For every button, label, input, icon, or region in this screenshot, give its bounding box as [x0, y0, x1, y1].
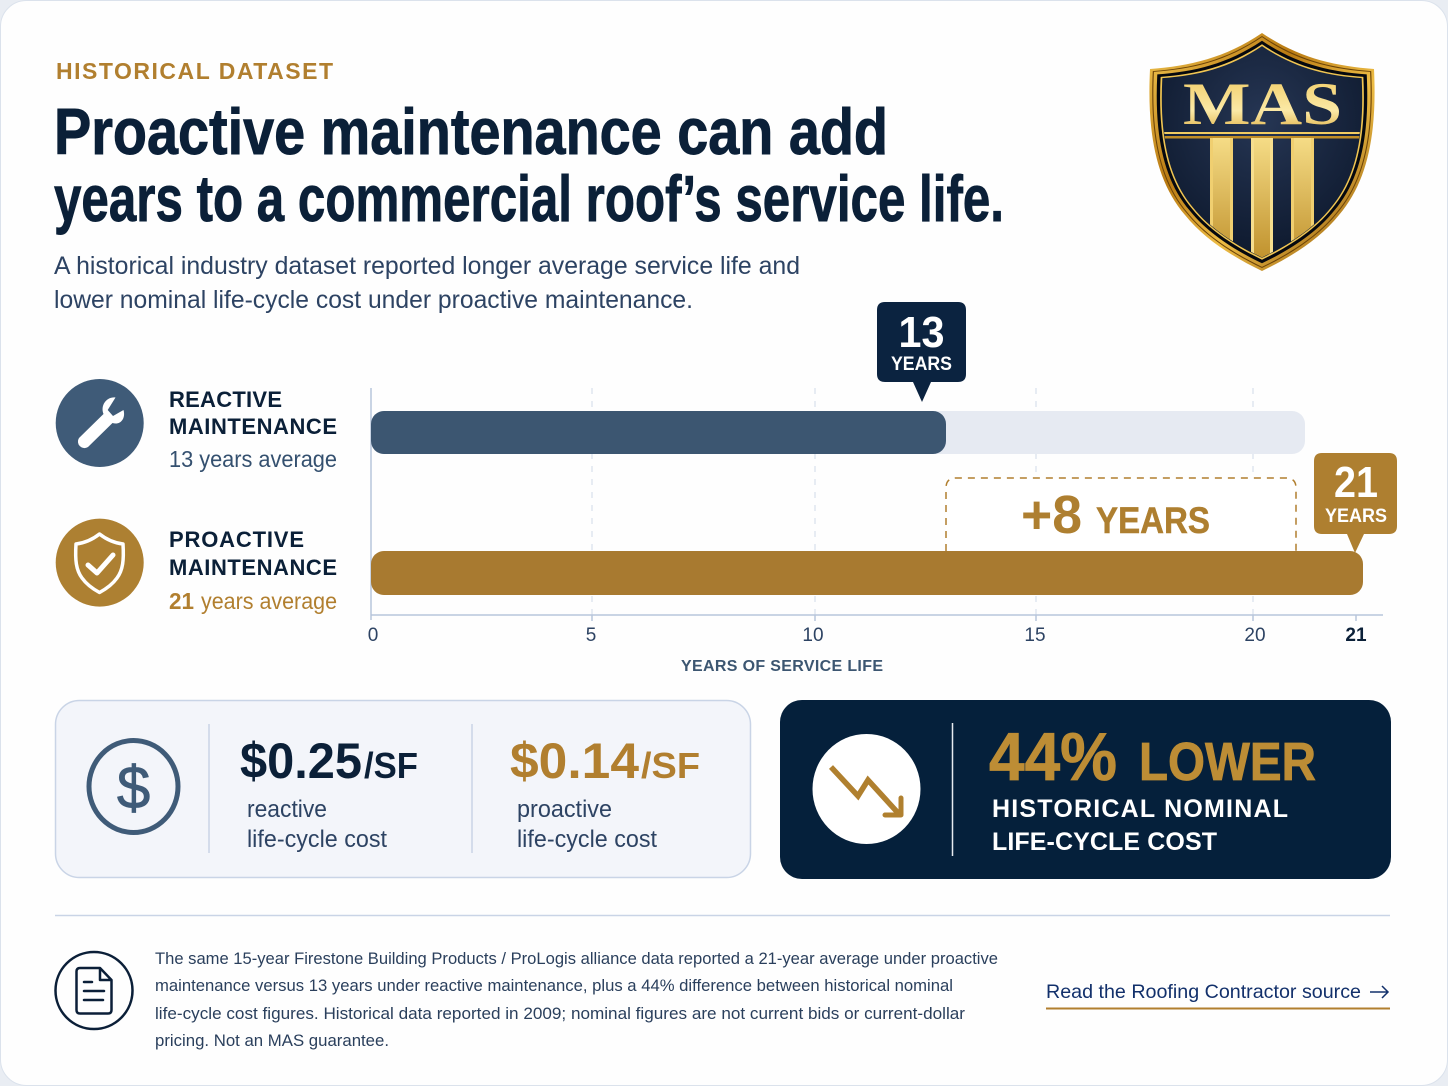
icon: dollar [89, 740, 178, 832]
footnote text [155, 950, 998, 1050]
subtitle: lower nominal life-cycle cost under proactive maintenance. [54, 286, 693, 314]
stat: proactive cost: life-cycle cost [517, 826, 657, 853]
stat headline: 44% [989, 719, 1117, 795]
subtitle [54, 252, 800, 314]
stat: reactive cost: /SF [364, 745, 418, 786]
footnote text: pricing. Not an MAS guarantee. [155, 1032, 389, 1050]
label: proactive maintenance: 21 [169, 588, 194, 614]
label: reactive maintenance: REACTIVE [169, 387, 282, 412]
title: Proactive maintenance can add [54, 95, 888, 168]
badge: 21 years: YEARS [1325, 506, 1387, 527]
stat headline [989, 719, 1316, 795]
label: proactive maintenance [169, 527, 337, 614]
subtitle: A historical industry dataset reported longer average service life and [54, 252, 800, 280]
footnote text: The same 15-year Firestone Building Products / ProLogis alliance data reported a 21-year average under proactive [155, 950, 998, 968]
icon: dollar: $ [117, 754, 150, 821]
axis labels: 15 [1024, 625, 1046, 646]
icon: downward trend [812, 734, 920, 844]
stat: proactive cost: /SF [641, 745, 700, 786]
badge: 13 years [877, 302, 966, 402]
label: proactive maintenance: years average [201, 588, 337, 614]
stat caption: HISTORICAL NOMINAL [992, 795, 1288, 823]
label: reactive maintenance [169, 387, 337, 472]
badge: 13 years: YEARS [891, 354, 952, 375]
stat: proactive cost: proactive [517, 796, 612, 823]
axis labels: 5 [586, 625, 596, 646]
source link: Read the Roofing Contractor source [1046, 981, 1361, 1003]
label: reactive maintenance: MAINTENANCE [169, 414, 337, 439]
stat headline: LOWER [1139, 732, 1316, 792]
stat caption [992, 795, 1288, 856]
stat: reactive cost: life-cycle cost [247, 826, 387, 853]
eyebrow: historical dataset: HISTORICAL DATASET [56, 58, 333, 84]
axis labels: 0 [368, 625, 378, 646]
label: proactive maintenance: PROACTIVE [169, 527, 304, 552]
axis labels: 20 [1244, 625, 1266, 646]
axis labels: 21 [1345, 625, 1367, 646]
callout: plus 8 years: +8 [1021, 485, 1082, 545]
label: reactive maintenance: 13 years average [169, 446, 337, 472]
stat: reactive cost [240, 733, 418, 853]
panel: cost per square foot [56, 700, 750, 878]
icon: shield check [56, 519, 144, 607]
stat: proactive cost [510, 733, 700, 853]
callout: plus 8 years: YEARS [1096, 500, 1210, 541]
axis title: YEARS OF SERVICE LIFE [681, 658, 883, 675]
logo: MAS shield [1149, 33, 1375, 271]
footnote text: life-cycle cost figures. Historical data reported in 2009; nominal figures are not current bids or current-dollar [155, 1005, 966, 1023]
icon: document [56, 952, 132, 1029]
axis labels: 10 [802, 625, 824, 646]
panel: 44 percent lower [780, 700, 1391, 879]
stat: proactive cost: $0.14 [510, 733, 639, 789]
axis labels [368, 625, 1367, 646]
badge: 21 years [1314, 453, 1397, 553]
icon: wrench [56, 379, 144, 467]
stat caption: LIFE-CYCLE COST [992, 828, 1217, 856]
stat: reactive cost: $0.25 [240, 733, 362, 789]
badge: 13 years: 13 [898, 308, 944, 357]
bar: reactive track and fill [371, 411, 1305, 454]
footnote text: maintenance versus 13 years under reactive maintenance, plus a 44% difference between historical nominal [155, 977, 953, 995]
stat: reactive cost: reactive [247, 796, 327, 823]
callout: plus 8 years [946, 478, 1296, 551]
label: proactive maintenance: MAINTENANCE [169, 555, 337, 580]
bar chart: service life [368, 302, 1397, 675]
title: years to a commercial roof’s service life. [54, 162, 1004, 235]
logo: MAS shield: MAS [1183, 71, 1342, 137]
badge: 21 years: 21 [1334, 458, 1378, 507]
bar: proactive [371, 551, 1363, 595]
title [54, 95, 1004, 235]
